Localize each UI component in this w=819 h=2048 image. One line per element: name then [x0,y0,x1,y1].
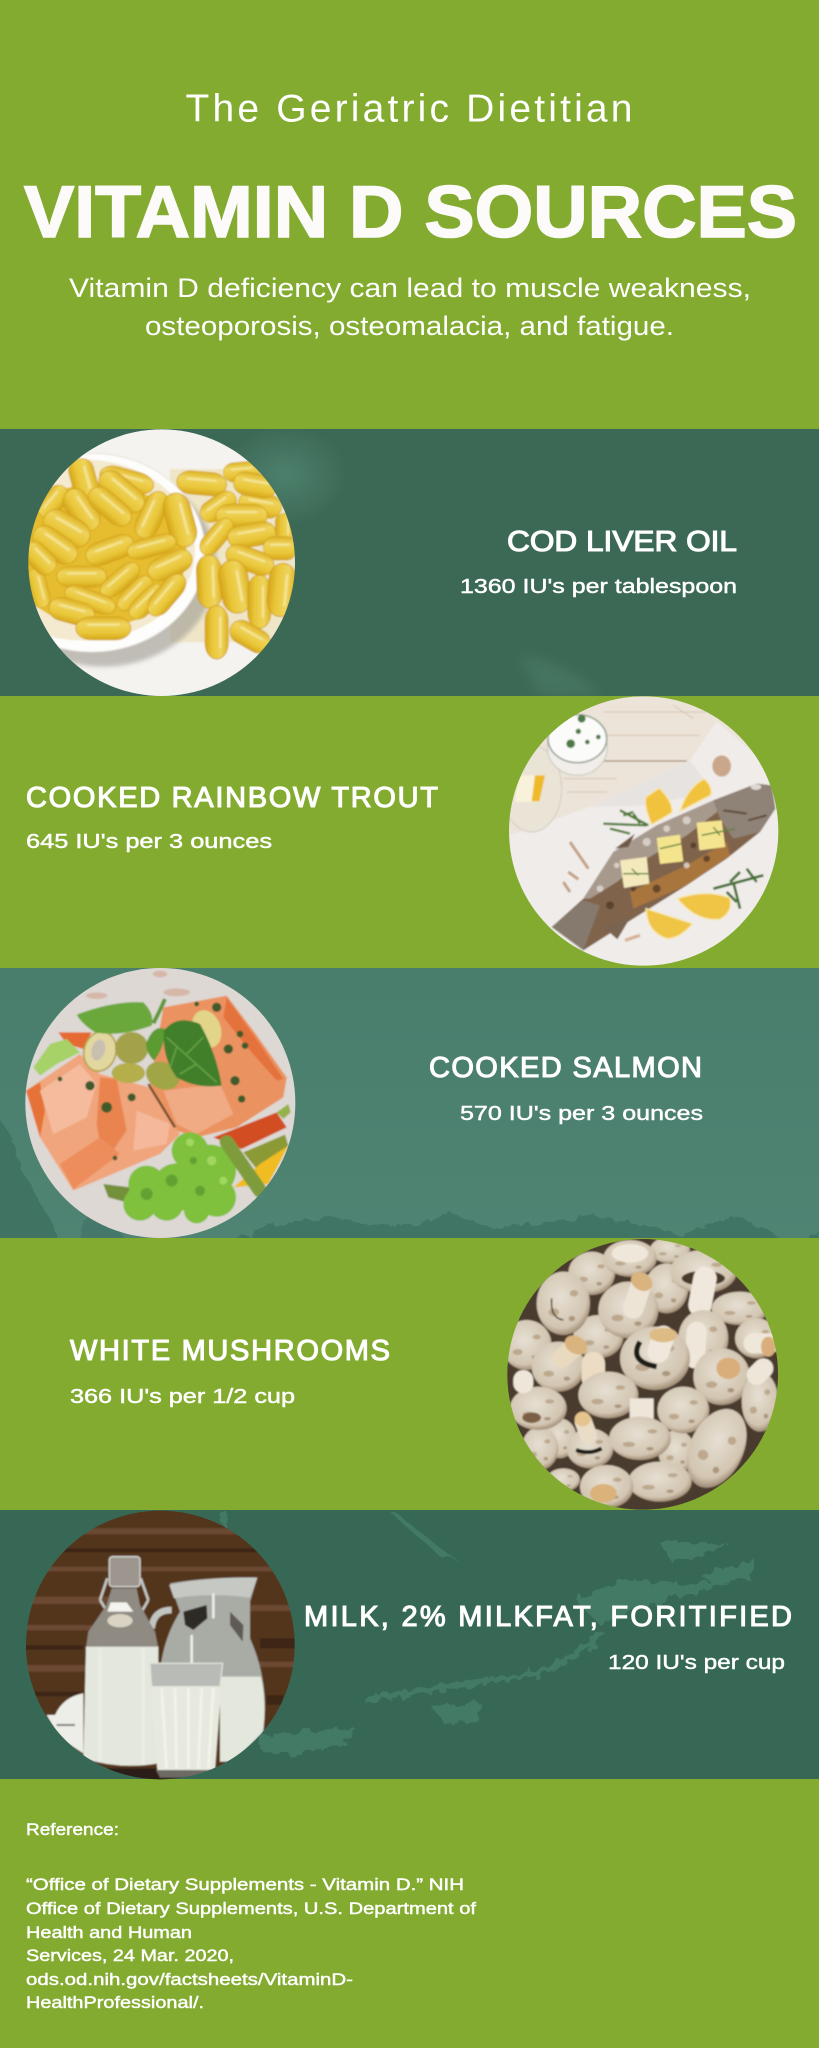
lettuce [123,1132,236,1223]
reference block: ods.od.nih.gov/factsheets/VitaminD- [26,1970,353,1989]
photo: cooked trout [500,692,787,972]
bottle [109,1557,140,1587]
panel: rainbow trout [26,692,787,972]
intro text: osteoporosis, osteomalacia, and fatigue. [145,311,674,341]
photo: milk bottles [20,1505,300,1785]
basil [77,1002,152,1034]
amount: cooked salmon: 570 IU's per 3 ounces [460,1103,703,1125]
reference block: HealthProfessional/. [26,1993,204,2012]
intro text: Vitamin D deficiency can lead to muscle weakness, [69,273,751,303]
reference block [26,1820,476,2012]
reference block: Health and Human [26,1923,192,1942]
heading: cod liver oil: COD LIVER OIL [507,526,737,558]
olives [82,1031,118,1073]
glass [510,746,562,833]
amount: white mushrooms: 366 IU's per 1/2 cup [70,1386,295,1408]
peppers and beans [213,1112,287,1149]
brand name: The Geriatric Dietitian [186,88,632,130]
reference block: “Office of Dietary Supplements - Vitamin D.” NIH [26,1875,464,1894]
salmon left [26,1054,180,1191]
photo: fish oil capsules [28,429,295,696]
fish [552,784,775,950]
panel: cod liver oil [0,425,819,705]
panel: cooked salmon [0,964,819,1245]
heading: fortified milk: MILK, 2% MILKFAT, FORITIFIED [304,1601,792,1633]
title: VITAMIN D SOURCES [24,172,797,253]
amount: rainbow trout: 645 IU's per 3 ounces [26,831,272,853]
glass [150,1663,223,1687]
reference block: Services, 24 Mar. 2020, [26,1946,234,1965]
dip cup [546,742,608,776]
intro text [69,273,751,341]
pitcher [160,1578,265,1762]
header [24,88,797,341]
panel: white mushrooms [70,1235,787,1515]
dill left [603,810,648,834]
reference block: Office of Dietary Supplements, U.S. Department of [26,1899,476,1918]
heading: white mushrooms: WHITE MUSHROOMS [70,1335,390,1367]
dill right [713,869,763,909]
lemon wedges front [677,893,731,920]
small jar [47,1693,83,1753]
lemon wedges back [645,788,672,825]
panel: fortified milk [0,1505,819,1785]
amount: cod liver oil: 1360 IU's per tablespoon [460,576,737,598]
heading: cooked salmon: COOKED SALMON [429,1052,702,1084]
reference block: Reference: [26,1820,119,1839]
photo: cooked salmon [20,964,300,1244]
heading: rainbow trout: COOKED RAINBOW TROUT [26,782,438,814]
butter [620,857,649,888]
amount: fortified milk: 120 IU's per cup [608,1652,785,1674]
salmon right [150,996,287,1137]
photo: white mushrooms [500,1235,787,1515]
